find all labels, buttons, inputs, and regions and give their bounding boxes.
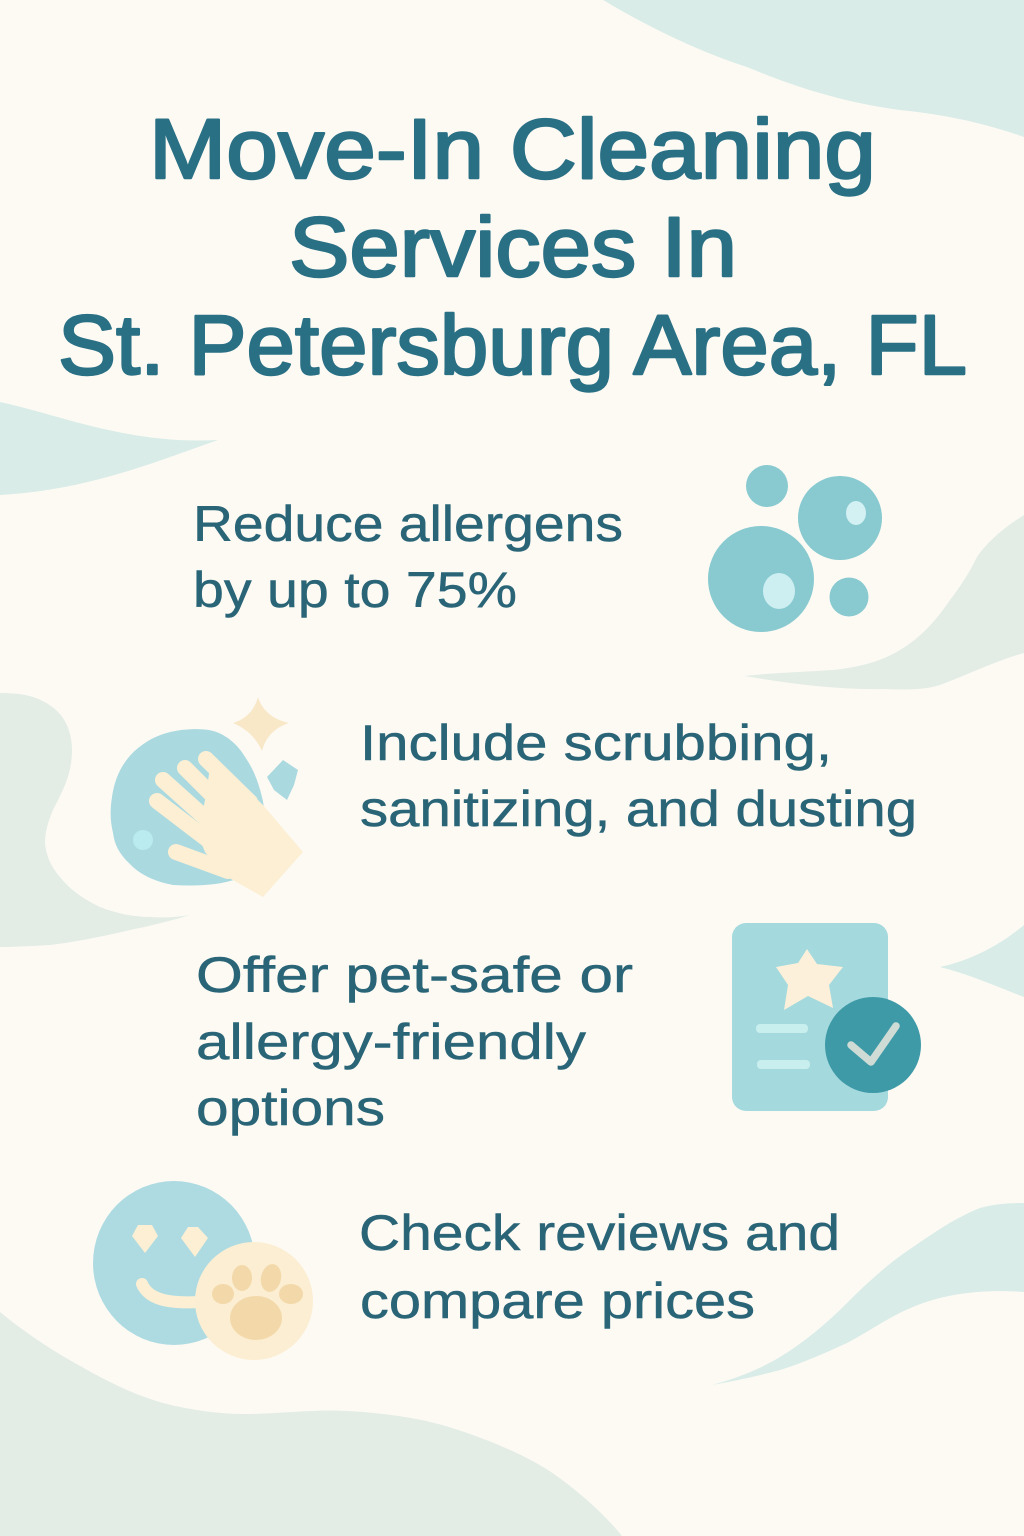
- text: offer pet-safe: options: [196, 1080, 385, 1136]
- icon: bubbles: [708, 465, 882, 632]
- icon: checklist with star and check: [732, 923, 921, 1111]
- text: include scrubbing: sanitizing, and dusting: [360, 781, 917, 837]
- hand: [157, 755, 303, 897]
- text: reduce allergens: [193, 496, 623, 618]
- gem: [267, 760, 298, 800]
- text: check reviews: Check reviews and: [359, 1205, 840, 1261]
- title: [58, 102, 967, 392]
- text: offer pet-safe: allergy-friendly: [196, 1014, 586, 1070]
- text: include scrubbing: [360, 715, 917, 837]
- text: reduce allergens: by up to 75%: [193, 562, 517, 618]
- icon: hand wiping: [111, 697, 303, 897]
- text: check reviews: compare prices: [360, 1273, 755, 1329]
- title: Services In: [289, 200, 737, 294]
- text: offer pet-safe: Offer pet-safe or: [196, 947, 633, 1003]
- text: include scrubbing: Include scrubbing,: [360, 715, 832, 771]
- title: St. Petersburg Area, FL: [58, 298, 967, 392]
- text: offer pet-safe: [196, 947, 633, 1136]
- text: reduce allergens: Reduce allergens: [193, 496, 623, 552]
- text: check reviews: [359, 1205, 840, 1329]
- title: Move-In Cleaning: [149, 102, 876, 196]
- sparkle: [233, 697, 289, 751]
- icon: smiley with paw: [93, 1181, 313, 1360]
